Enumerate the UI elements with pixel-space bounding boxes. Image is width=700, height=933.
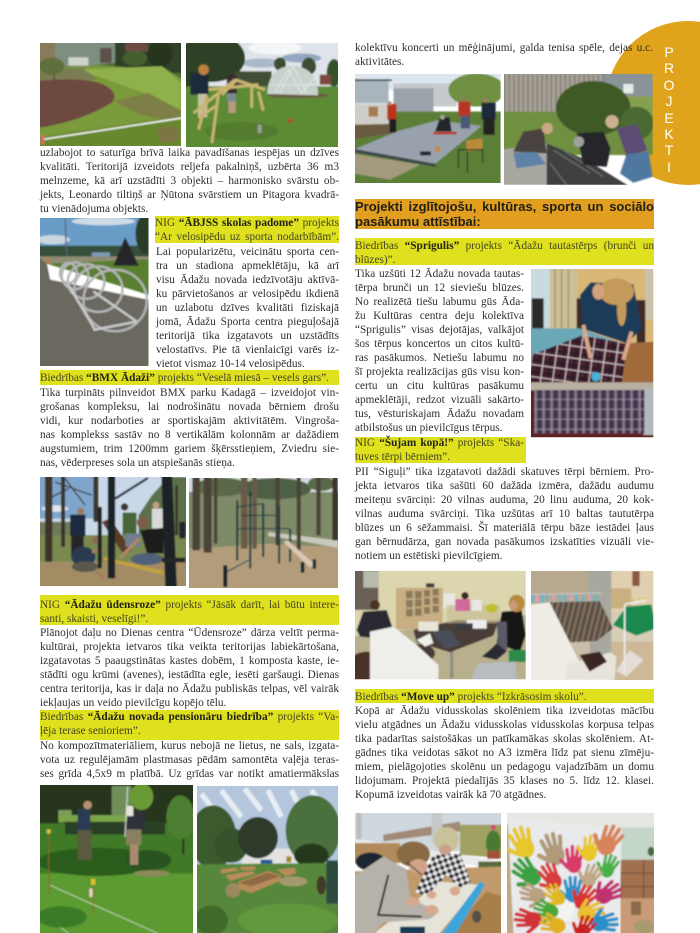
side tab label: PROJEKTI: K [664,126,674,142]
text block: BMX park: Tika turpināts pilnveidot BMX parku Kadagā – izveidojot vin- [40,387,339,399]
text block: BMX park: vidi, kur nodarboties ar sportiskajām aktivitātēm. Vingroša- [40,415,339,427]
text block: stage costumes: gan bērnudārza, gan novada pasākumos izskatīties vizuāli vie- [355,536,654,548]
text block: permaculture garden: centra teritorija, kas ir daļa no Ādažu publiskās telpas, vēl vairāk [40,683,339,695]
highlighted heading: pensionāru biedrība: Biedrības “Ādažu novada pensionāru biedrība” projekts “Va- [40,711,339,723]
highlighted heading: pensionāru biedrība [40,710,339,740]
text block: folk costumes: apmeklētāji, redzot vizuāli sakārto- [355,394,524,406]
text block: bicycle rack project: visu Ādažu novada iedzīvotāju aktīvā- [156,274,339,286]
highlighted heading: pensionāru biedrība: ļēja terase senioriem”. [40,725,141,737]
text block: terrace continuation: kolektīvu koncerti un mēģinājumi, galda tenisa spēle, dejas u.c. [355,42,653,54]
text block: BMX park: augstumiem, trim 1200mm gariem šķērsstieņiem, Zviedru sie- [40,443,339,455]
text block: school memo posters: Kopumā izveidotas vairāk kā 70 atgādnes. [355,789,546,801]
text block: open terrace: ses grīda 4,5x9 m platībā. Uz grīdas var notikt amatiermākslas [40,768,339,780]
text block: bicycle rack project: ku pārvietošanos ar velosipēdu ikdienā [156,288,339,300]
highlighted heading: Šujam kopā: NIG “Šujam kopā!” projekts “Ska- [355,437,524,449]
text block: mound project continuation [40,147,339,215]
text block: bicycle rack project: teritorijā tika izgatavots un uzstādīts [156,330,339,342]
text block: mound project continuation: melnzeme, kā arī uzstādīti 3 objekti – harmonisko svārstu ob- [40,175,339,187]
side tab label: PROJEKTI: T [665,142,673,158]
text block: mound project continuation: uzlabojot to saturīga brīvā laika pavadīšanas iespējas un dzīves [40,147,339,159]
decorative orange circle tab [606,21,700,185]
text block: folk costumes: žu Kultūras centra deju kolektīva [355,310,524,322]
side tab label: PROJEKTI: O [664,77,674,93]
highlighted heading: Šujam kopā: tuves tērpi bērniem”. [355,451,450,463]
text block: BMX park: grošanas kompleksu, lai nodrošinātu novada bērniem drošu [40,401,339,413]
photo: sewing workshop [355,571,526,680]
text block: school memo posters: vielu atgādnes un Ādažu vidusskolas vidusskolas korpusa telpas [355,719,654,731]
text block: folk costumes: Tika uzšūti 12 Ādažu novada tautas- [355,268,524,280]
text block: stage costumes: notiem un estētiski pievilcīgiem. [355,550,502,562]
text block: bicycle rack project: vietot vismaz 10-14 velosipēdus. [156,358,305,370]
text block: folk costumes: šos tērpus koncertos un citos kultū- [355,338,524,350]
side tab label: PROJEKTI: R [664,60,674,76]
text block: stage costumes [354,466,654,562]
side tab label: PROJEKTI: I [667,159,671,175]
text block: bicycle rack project: jomā, Ādažu Sporta centra pieguļošajā [156,316,339,328]
side tab label: PROJEKTI: P [664,44,674,60]
highlighted heading: Sprigulis: Biedrības “Sprigulis” projekts “Ādažu tautastērps (brunči un [355,240,654,252]
text block: BMX park [40,387,339,469]
text block: folk costumes: atbilstošus un pievilcīgus tērpus. [355,422,502,434]
text block: bicycle rack project: velostatīvs. Pie tā vienlaicīgi varēs iz- [156,344,339,356]
photo: men on lawn surveying [40,785,193,933]
highlighted heading: Move up [355,689,654,703]
section heading: education, culture, sport projects [355,199,654,229]
text block: BMX park: nas, vēderpreses sola un atspiešanās stieņa. [40,457,235,469]
text block: stage costumes: PII “Siguļi” tika izgatavoti dažādi skatuves tērpi bērniem. Pro- [355,466,654,478]
photo: terrace deck with workers [355,74,501,183]
section heading: education, culture, sport projects: pasākumu attīstībai: [355,214,481,229]
section heading: education, culture, sport projects: Projekti izglītojošu, kultūras, sporta un sociālo [355,199,654,214]
photo: students working on poster [355,813,501,933]
text block: stage costumes: jekta ietvaros tika sašūti 60 dažāda izmēra, dažādu audumu [355,480,654,492]
side tab label: PROJEKTI: E [664,110,674,126]
text block: permaculture garden: izgatavotas 5 paaugstinātas kastes dobēm, 1 komposta kaste, ie- [40,655,339,667]
highlighted heading: Ādažu ūdensroze [40,595,339,625]
text block: permaculture garden [40,627,339,709]
text block: bicycle rack project [156,246,340,370]
text block: folk costumes [355,268,524,434]
highlighted heading: Ādažu ūdensroze: santi, skaisti, veselīgi!”. [40,613,148,625]
photo: bicycle rack [40,218,148,366]
highlighted heading: Sprigulis [355,238,654,265]
text block: mound project continuation: kvalitāti. Teritorijā izveidots reljefa pakalniņš, uzbērta 36 m3 [40,161,339,173]
photo: grassy mound with soil patch [40,43,181,146]
photo: wooden structure and geodesic dome [186,43,338,147]
highlighted heading: ĀBJSS skolas padome: NIG “ĀBJSS skolas padome” projekts [155,217,339,229]
text block: terrace continuation [355,42,653,68]
photo: workout park construction [40,477,186,586]
text block: stage costumes: meiteņu svārciņi: 20 vilnas auduma, 20 linu auduma, 20 kok- [355,494,654,506]
text block: folk costumes: No realizētā tiešu labumu gūs Āda- [355,296,524,308]
text block: open terrace: No kompozītmateriāliem, kurus nebojā ne lietus, ne sals, izgata- [40,740,339,752]
text block: folk costumes: šī projekta realizācijas gūs visu kon- [355,366,524,378]
highlighted heading: Move up: Biedrības “Move up” projekts “Izkrāsosim skolu”. [355,691,587,703]
text block: open terrace: vota uz regulējamām plastmasas pēdām samontēta vaļēja teras- [40,754,339,766]
text block: bicycle rack project: un uzlabotu dzīves kvalitāti fiziskajā [156,302,339,314]
highlighted heading: Šujam kopā [355,437,526,463]
text block: BMX park: nas komplekss sastāv no 8 vertikālām kolonnām ar dažādiem [40,429,339,441]
text block: folk costumes: tus, vēsturiskajam Ādažu novadam [355,408,524,420]
text block: folk costumes: certu un citu kultūras pasākumu [355,380,524,392]
text block: mound project continuation: jekts, Leonardo tiltiņš ar Ņūtona svārstiem un Pitagora kvadrā- [40,189,339,201]
text block: school memo posters: tika padarītas saistošākas un patīkamākas skolas skolēniem. At- [355,733,654,745]
text block: stage costumes: vilnas auduma svārciņi. Tika uzšūtas arī 10 baltas taututērpa [355,508,654,520]
highlighted heading: ĀBJSS skolas padome [155,216,339,243]
text block: school memo posters [355,705,654,801]
text block: school memo posters: lidojumam. Projektā piedalījās 35 klases no 5. līdz 12. klasei. [355,775,654,787]
text block: permaculture garden: kultūrai, projekta ietvaros tika veikta teritorijas labiekārtošana, [40,641,339,653]
text block: folk costumes: tērpa brunči un 12 sieviešu blūzes. [355,282,524,294]
side tab label: PROJEKTI [664,44,674,175]
highlighted heading: ĀBJSS skolas padome: “Ar velosipēdu uz sporta nodarbībām”. [155,231,339,243]
text block: school memo posters: Kopā ar Ādažu vidusskolas skolēniem tika izveidotas mācību [355,705,654,717]
photo: stage costumes on racks [531,571,654,680]
text block: permaculture garden: iekļaujas un veido pievilcīgu kopējo tēlu. [40,697,226,709]
text block: mound project continuation: tu vienādojuma objekts. [40,203,148,215]
photo: poster of coloured paper hands [507,813,654,933]
photo: woman with tartan skirt and skirts on rail [531,269,654,438]
photo: men assembling deck boards [504,74,653,185]
text block: terrace continuation: aktivitātes. [355,56,404,68]
text block: bicycle rack project: Lai popularizētu, veicinātu sporta cen- [156,246,339,258]
text block: folk costumes: ras pasākumos. Netiešu labumu no [355,352,524,364]
text block: stage costumes: blūzes un 6 sēžammaisi. Šī materiālā tērpu bāze iestādei ļaus [355,522,654,534]
text block: bicycle rack project: tra un stadiona apmeklētāju, kā arī [156,260,339,272]
photo: completed workout park [189,478,338,588]
text block: permaculture garden: stādīti ogu krūmi (avenes), iestādīta egle, iesēti garšaugi. Dienas [40,669,339,681]
text block: folk costumes: “Sprigulis” visas dejotājas, valkājot [355,324,524,336]
highlighted heading: Ādažu ūdensroze: NIG “Ādažu ūdensroze” projekts “Jāsāk darīt, lai būtu intere- [40,599,339,611]
side tab label: PROJEKTI: J [666,93,672,109]
highlighted heading: Sprigulis: blūzes)”. [355,254,395,266]
photo: raised garden beds [197,786,338,933]
text block: school memo posters: gādnes tika veidotas sākot no A3 izmēra līdz pat sienu zīmēju- [355,747,654,759]
text block: open terrace [40,740,339,780]
text block: permaculture garden: Plānojot daļu no Dienas centra “Ūdensroze” dārza veltīt perma- [40,627,339,639]
highlighted heading: BMX Ādaži: Biedrības “BMX Ādaži” projekts “Veselā miesā – vesels gars”. [40,372,329,384]
text block: school memo posters: miem, pielāgojoties skolēnu un pedagogu vajadzībām un domu [355,761,654,773]
